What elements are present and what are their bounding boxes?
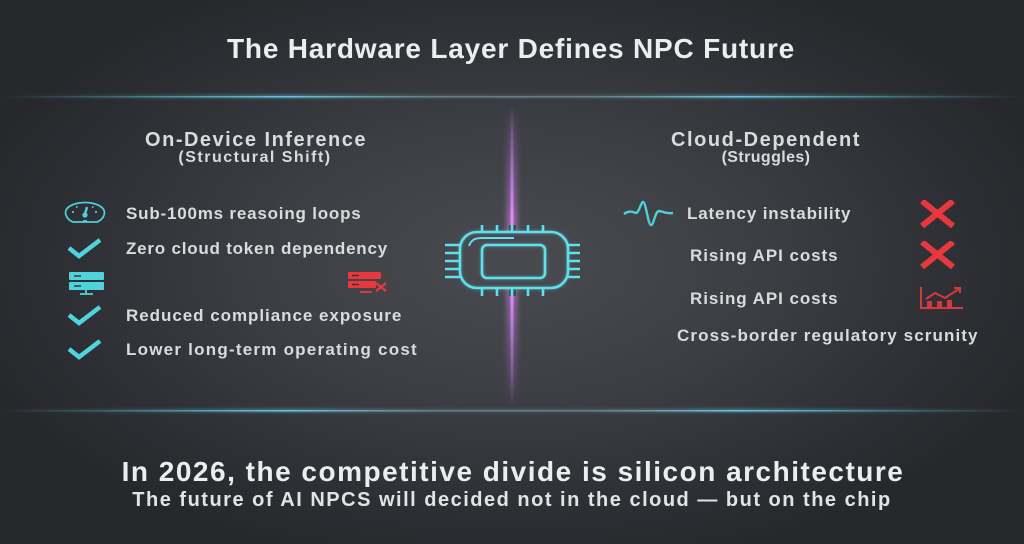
heading: cloud-dependent: Cloud-Dependent (671, 129, 861, 151)
title: The Hardware Layer Defines NPC Future (227, 33, 795, 64)
icon: check (68, 339, 102, 360)
icon: check (68, 238, 102, 259)
panel: cloud-dependent (623, 129, 979, 345)
subheading: struggles: (Struggles) (722, 149, 810, 166)
icon: chip (445, 225, 580, 296)
conclusion subtext: The future of AI NPCS will decided not in the cloud — but on the chip (132, 489, 892, 511)
icon: server red (348, 272, 387, 293)
icon: server cyan (69, 272, 104, 295)
text: zero cloud: Zero cloud token dependency (126, 239, 388, 258)
text: compliance: Reduced compliance exposure (126, 306, 402, 325)
icon: gauge (64, 202, 106, 223)
text: rising api costs: Rising API costs (690, 246, 839, 265)
icon: cost chart (920, 287, 963, 309)
icon: pulse (623, 200, 674, 226)
text: rising api costs: Rising API costs (690, 289, 839, 308)
heading: on-device: On-Device Inference (145, 129, 367, 151)
text: latency: Latency instability (687, 204, 851, 223)
text: sub-100ms: Sub-100ms reasoing loops (126, 204, 362, 223)
conclusion headline: In 2026, the competitive divide is silicon architecture (122, 456, 904, 487)
text: cross-border: Cross-border regulatory scrunity (677, 326, 979, 345)
text: operating cost: Lower long-term operating cost (126, 340, 418, 359)
panel: on-device inference (64, 129, 418, 360)
icon: red x (920, 241, 955, 269)
icon: red x (920, 200, 955, 228)
subheading: structural shift: (Structural Shift) (178, 149, 332, 166)
icon: check (68, 305, 102, 326)
